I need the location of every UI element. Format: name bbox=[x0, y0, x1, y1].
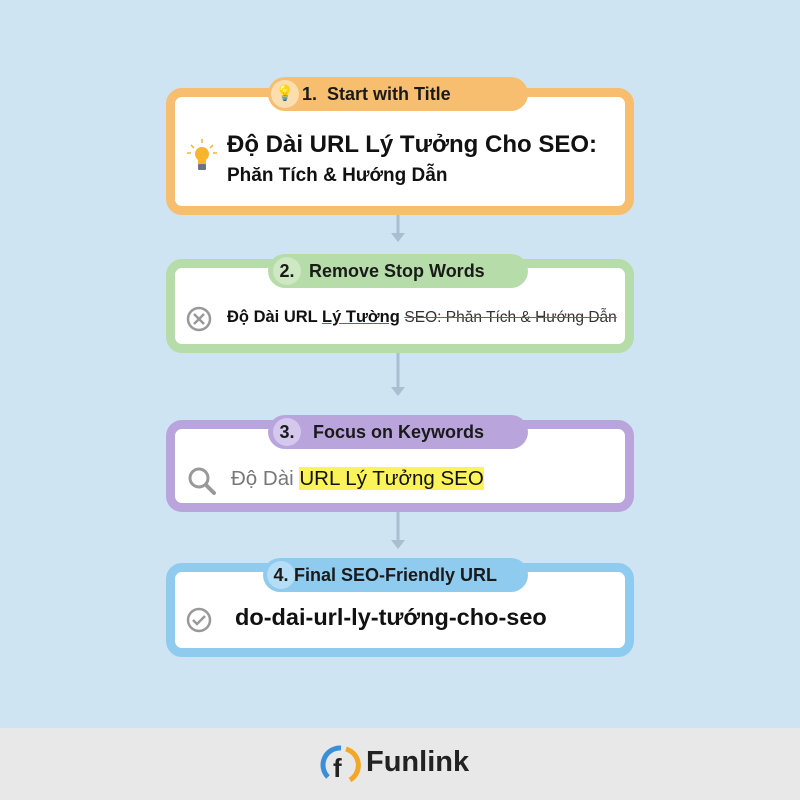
tab 3 bbox=[268, 415, 528, 449]
panel 2: remove stop words bbox=[166, 259, 634, 353]
tab 2: Remove Stop Words bbox=[309, 261, 485, 281]
tab 1: 1. Start with Title bbox=[302, 84, 451, 104]
icon: check circle bbox=[186, 608, 212, 632]
brand name: Funlink bbox=[366, 746, 469, 778]
panel 3: focus on keywords bbox=[166, 420, 634, 512]
tab 1 bbox=[268, 77, 528, 111]
title text: Độ Dài URL Lý Tưởng Cho SEO: bbox=[227, 131, 597, 158]
final url text: do-dai-url-ly-tướng-cho-seo bbox=[235, 604, 547, 630]
panel 1: start with title: Phăn Tích & Hướng Dẫn bbox=[227, 165, 447, 186]
text with strikethrough: Độ Dài URL Lý Tường SEO: Phăn Tích & Hướng Dẫn bbox=[227, 308, 617, 326]
tab 3: Focus on Keywords bbox=[313, 422, 484, 442]
arrow 1 bbox=[391, 215, 405, 242]
tab 2 bbox=[268, 254, 528, 288]
arrow 2 bbox=[391, 353, 405, 396]
footer bbox=[0, 728, 800, 800]
panel 4: final url bbox=[166, 563, 634, 657]
logo icon bbox=[320, 746, 361, 783]
icon: cross circle bbox=[186, 306, 212, 332]
logo icon: f bbox=[333, 753, 342, 783]
icon: magnifier bbox=[188, 468, 216, 496]
arrow 3 bbox=[391, 512, 405, 549]
tab 2: 2. bbox=[279, 261, 294, 281]
panel 1: start with title bbox=[166, 88, 634, 215]
icon: small bulb bbox=[271, 80, 299, 108]
tab 4: 4. bbox=[273, 565, 288, 585]
keyword text: Độ Dài URL Lý Tưởng SEO bbox=[231, 467, 484, 490]
tab 4: Final SEO-Friendly URL bbox=[294, 565, 497, 585]
tab 3: 3. bbox=[279, 422, 294, 442]
tab 4 bbox=[263, 558, 528, 592]
icon: light bulb bbox=[187, 139, 217, 170]
icon: small bulb: 💡 bbox=[276, 85, 294, 102]
